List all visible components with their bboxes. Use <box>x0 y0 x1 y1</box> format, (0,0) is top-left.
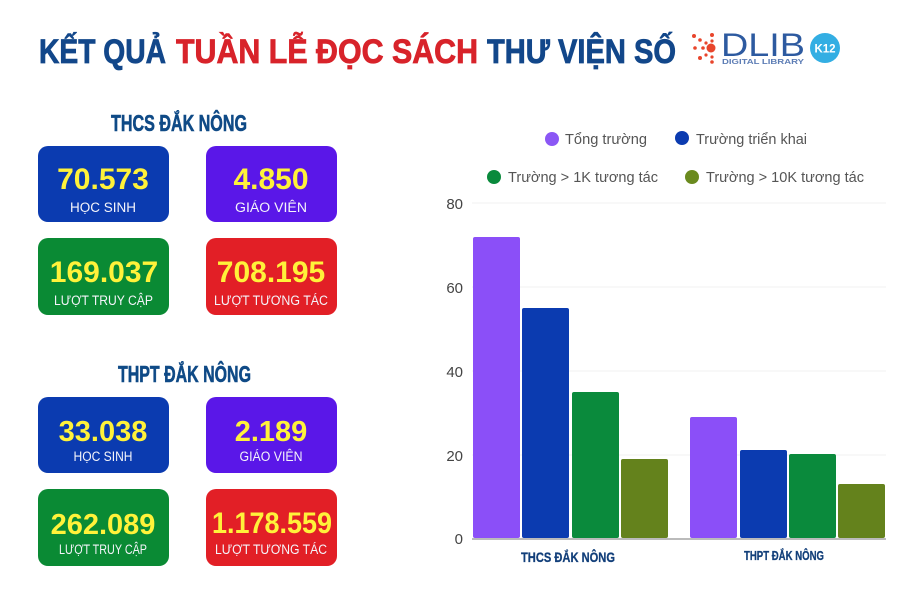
bar chart: 0 <box>455 531 463 548</box>
heading: THCS Đắk Nông: THCS ĐẮK NÔNG <box>111 109 247 136</box>
title: KẾT QUẢ <box>39 33 166 71</box>
title <box>39 32 676 71</box>
icon: DLib K12 logo: K12 <box>814 44 836 56</box>
panel: THCS interactions <box>206 238 337 315</box>
title: THƯ VIỆN SỐ <box>487 32 676 71</box>
panel: THCS visits <box>38 238 169 315</box>
panel: THPT teachers: 2.189 <box>235 416 307 448</box>
panel: THCS teachers: GIÁO VIÊN <box>235 200 307 215</box>
panel: THPT teachers: GIÁO VIÊN <box>240 449 302 464</box>
bar chart: 80 <box>446 196 463 213</box>
heading: THPT Đắk Nông: THPT ĐẮK NÔNG <box>118 360 251 387</box>
panel: THCS visits: 169.037 <box>50 256 158 289</box>
panel: THPT students: HỌC SINH <box>74 449 132 464</box>
panel: THPT visits: 262.089 <box>51 509 155 541</box>
panel: THCS visits: LƯỢT TRUY CẬP <box>54 293 153 308</box>
panel: THPT interactions: LƯỢT TƯƠNG TÁC <box>215 542 327 557</box>
panel: THPT students <box>38 397 169 473</box>
icon: DLib K12 logo: DIGITAL LIBRARY <box>722 59 804 66</box>
chart legend <box>487 131 864 186</box>
panel: THPT visits: LƯỢT TRUY CẬP <box>59 542 147 557</box>
bar chart: 60 <box>446 280 463 297</box>
panel: THCS students <box>38 146 169 222</box>
chart legend: Tổng trường <box>565 131 647 148</box>
chart legend: Trường > 1K tương tác <box>508 169 658 186</box>
bar chart: 40 <box>446 364 463 381</box>
panel: THPT students: 33.038 <box>59 416 147 448</box>
panel: THCS interactions: 708.195 <box>217 256 325 289</box>
bar chart <box>446 196 886 565</box>
bar chart: 20 <box>446 448 463 465</box>
bar chart: THCS ĐẮK NÔNG <box>521 548 615 565</box>
panel: THCS interactions: LƯỢT TƯƠNG TÁC <box>214 293 328 308</box>
chart legend: Trường triển khai <box>696 131 807 148</box>
panel: THPT teachers <box>206 397 337 473</box>
panel: THPT interactions <box>206 489 337 566</box>
panel: THPT visits <box>38 489 169 566</box>
icon: DLib K12 logo: DLIB <box>721 27 805 63</box>
panel: THPT interactions: 1.178.559 <box>212 507 332 540</box>
chart legend: Trường > 10K tương tác <box>706 169 864 186</box>
panel: THCS teachers: 4.850 <box>233 163 309 196</box>
panel: THCS teachers <box>206 146 337 222</box>
bar chart: THPT ĐẮK NÔNG <box>744 548 824 563</box>
title: TUẦN LỄ ĐỌC SÁCH <box>176 33 478 71</box>
panel: THCS students: HỌC SINH <box>70 200 136 215</box>
icon: DLib K12 logo <box>692 27 840 66</box>
panel: THCS students: 70.573 <box>57 163 149 196</box>
